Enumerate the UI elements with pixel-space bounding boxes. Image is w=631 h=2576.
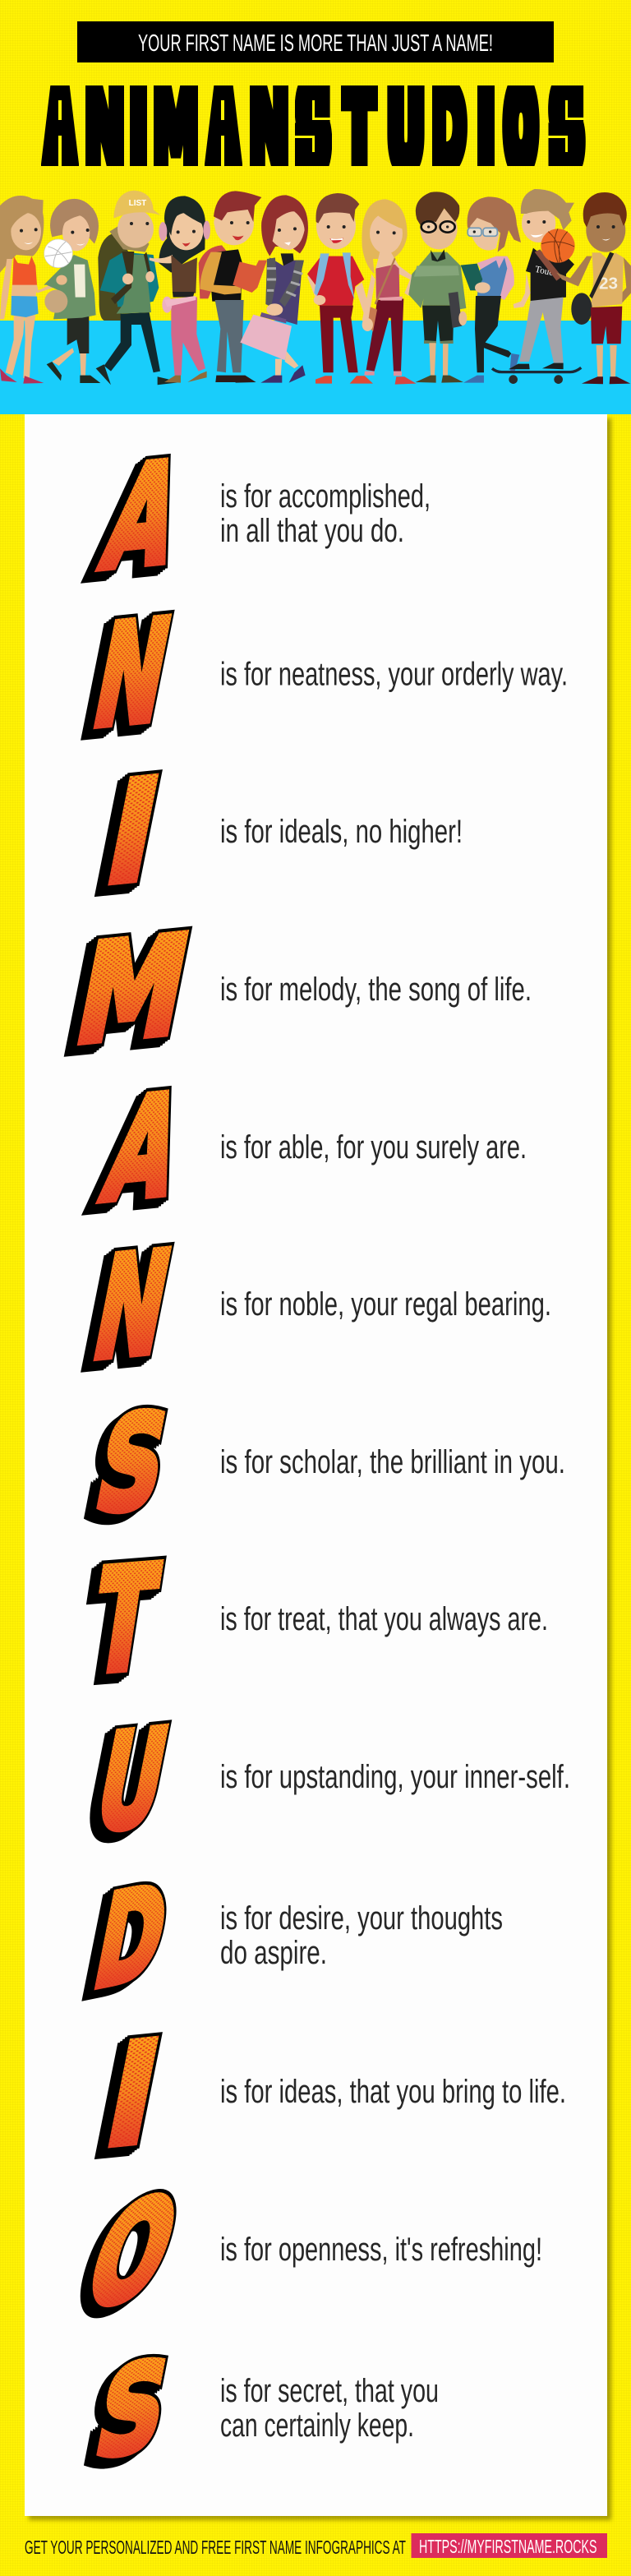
big letter A: A — [91, 1064, 196, 1233]
figure: boy with orange book — [199, 191, 267, 383]
row: letter D, desire — [84, 1856, 503, 2018]
figure: man with cap and backpack — [96, 191, 181, 385]
big letter S: S — [85, 1386, 178, 1543]
title: name in heavy block letters: A — [210, 65, 237, 192]
title: name in heavy block letters: S — [297, 65, 330, 193]
figure: girl with red hair and pink bag — [240, 195, 308, 383]
left group of characters — [0, 191, 308, 385]
row: letter I, ideas — [94, 2013, 566, 2178]
big letter M: M — [65, 907, 200, 1075]
big letter S: S — [85, 2334, 178, 2488]
title: name in heavy block letters: D — [431, 64, 467, 192]
title: name in heavy block letters: A — [46, 65, 74, 192]
text D — [220, 1900, 503, 1971]
row: letter U, upstanding — [85, 1701, 570, 1861]
big letter S: S — [85, 1386, 178, 1543]
right group of characters — [307, 189, 631, 385]
row: letter N, noble — [82, 1222, 551, 1392]
big letter T: T — [84, 1537, 165, 1704]
title: name in heavy block letters: I — [473, 65, 499, 192]
row: letter O, openness — [71, 2162, 542, 2343]
big letter N: N — [82, 1222, 182, 1392]
big letter D: D — [84, 1856, 178, 2018]
row: letter S, secret — [85, 2334, 439, 2488]
text A: in all that you do. — [220, 513, 404, 549]
row: letter A, accomplished — [90, 432, 431, 601]
figure: boy on skateboard — [492, 189, 581, 384]
row: letter I, ideals — [94, 750, 463, 916]
big letter M: M — [65, 907, 200, 1075]
big letter O: O — [71, 2162, 194, 2343]
header banner: tagline bar — [77, 21, 554, 62]
figure: boy in red shirt — [307, 193, 373, 384]
big letter S: S — [85, 2334, 178, 2488]
figure: boy in yellow basketball jersey: 23 — [599, 275, 618, 293]
title: name in heavy block letters: U — [387, 65, 425, 193]
big letter O: O — [71, 2162, 194, 2343]
big letter N: N — [82, 590, 182, 759]
figure: girl in orange top — [0, 196, 66, 384]
row: letter A, able — [91, 1064, 527, 1233]
title: name in heavy block letters: I — [126, 65, 151, 192]
row: letter S, scholar — [85, 1386, 565, 1543]
title: name in heavy block letters: N — [248, 65, 290, 192]
title: name in heavy block letters: M — [153, 64, 199, 193]
big letter A: A — [91, 1064, 196, 1233]
big letter I: I — [94, 2013, 171, 2178]
panel: white name poem background — [25, 414, 607, 2516]
figure: man with cap and backpack: LIST — [129, 199, 146, 208]
big letter I: I — [94, 750, 171, 916]
big letter D: D — [84, 1856, 178, 2018]
row: letter N, neatness — [82, 590, 568, 759]
title: name in heavy block letters: T — [344, 65, 375, 193]
title: name in heavy block letters: O — [504, 64, 537, 192]
text S — [220, 2373, 439, 2444]
row: letter T, treat — [84, 1537, 548, 1704]
big letter A: A — [90, 432, 196, 601]
ground band behind characters — [0, 321, 631, 414]
big letter N: N — [82, 590, 182, 759]
title: name in heavy block letters: N — [84, 65, 126, 192]
figure: boy in yellow basketball jersey — [556, 192, 631, 384]
text D: is for desire, your thoughts — [220, 1900, 503, 1937]
title: name in heavy block letters — [46, 64, 586, 193]
text S: is for secret, that you — [220, 2373, 439, 2409]
big letter I: I — [94, 750, 171, 916]
title: name in heavy block letters: S — [550, 65, 583, 193]
big letter T: T — [84, 1537, 165, 1704]
figure: girl with pink headphones — [150, 196, 210, 383]
row: letter M, melody — [65, 907, 532, 1075]
figure: boy on skateboard: Touch — [534, 265, 559, 279]
big letter U: U — [85, 1701, 178, 1861]
big letter U: U — [85, 1701, 178, 1861]
figure: girl with ponytail and tablet — [461, 196, 521, 383]
text I: is for ideals, no higher! — [220, 814, 463, 850]
figure: girl with volleyball — [44, 199, 100, 383]
text D: do aspire. — [220, 1935, 327, 1971]
big letter N: N — [82, 1222, 182, 1392]
text S: can certainly keep. — [220, 2407, 414, 2444]
big letter I: I — [94, 2013, 171, 2178]
figure: boy with black glasses and laptop — [408, 192, 467, 383]
big letter A: A — [90, 432, 196, 601]
text A: is for accomplished, — [220, 478, 431, 515]
figure: blonde girl with shoulder bag — [362, 199, 417, 385]
illustration: row of twelve young people — [0, 189, 631, 385]
text A — [220, 478, 431, 549]
